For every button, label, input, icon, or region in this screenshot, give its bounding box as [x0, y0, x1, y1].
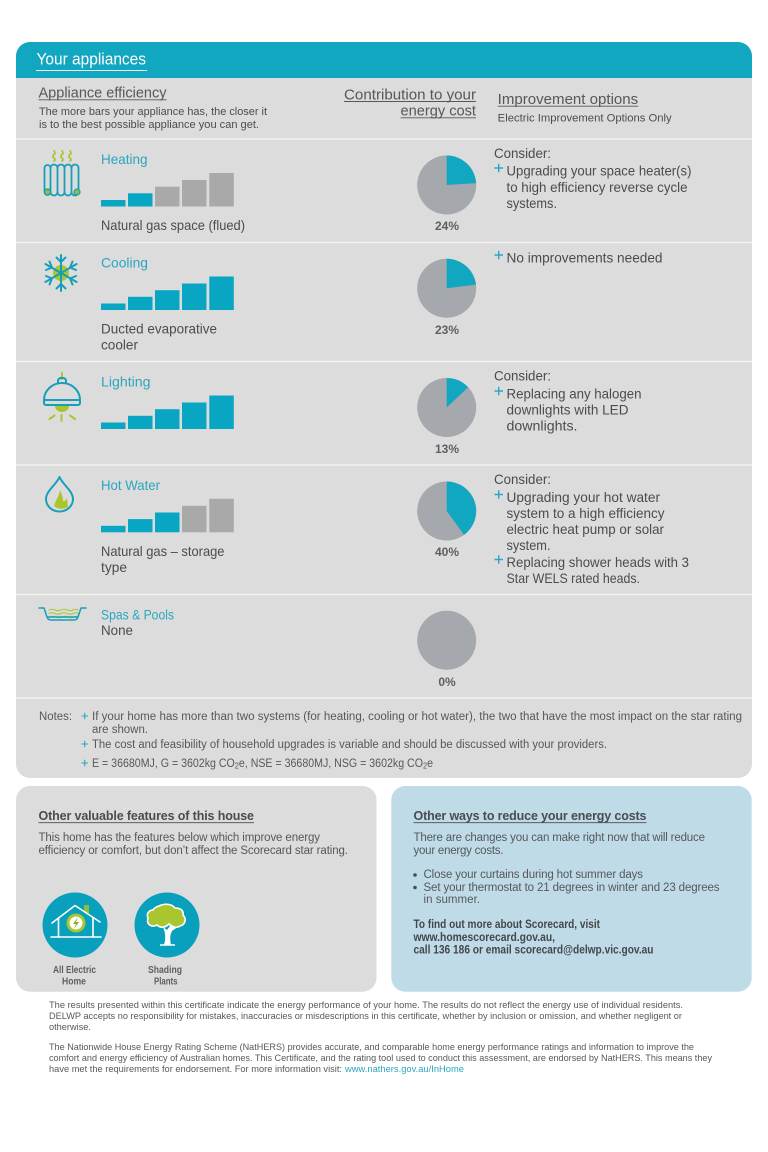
icon: water drop with flame — [46, 477, 73, 511]
improvement options: cooling: No improvements needed — [506, 250, 662, 266]
panel: your appliances — [16, 42, 752, 778]
text: features description — [38, 832, 348, 857]
text: none: None — [101, 622, 133, 638]
text: cooling system — [101, 320, 217, 352]
bar chart: heating efficiency — [101, 173, 234, 206]
list: energy tips: in summer. — [424, 894, 480, 906]
heading: improvement options: Improvement options — [498, 91, 638, 108]
improvement options: lighting — [494, 368, 642, 434]
improvement options: hot water: Replacing shower heads with 3 — [506, 554, 689, 570]
icon: radiator — [44, 151, 80, 196]
label: heating: Heating — [101, 151, 148, 167]
icon: shading plants tree — [134, 892, 200, 958]
list: energy tips — [413, 869, 720, 906]
text: hot water system — [101, 543, 225, 575]
label: cooling: Cooling — [101, 254, 148, 270]
row: heating — [44, 145, 692, 233]
label: lighting: Lighting — [101, 374, 150, 390]
label: shading plants: Plants — [154, 977, 178, 988]
text: NatHERS statement: www.nathers.gov.au/InHome — [344, 1064, 464, 1075]
row: lighting — [44, 368, 642, 456]
notes: Notes: — [39, 711, 72, 723]
text: NatHERS statement: comfort and energy efficiency of Australian homes. This Certificate, and the rating tool used to conduct this assessment, are endorsed by NatHERS. This means they — [49, 1053, 712, 1064]
text: find out more: www.homescorecard.gov.au, — [413, 932, 555, 944]
icon: all electric home — [42, 892, 108, 958]
heading: contribution to energy cost — [344, 86, 477, 120]
label: all electric home — [53, 965, 96, 988]
text: changes description: your energy costs. — [414, 845, 504, 857]
heading: other valuable features: Other valuable features of this house — [38, 809, 254, 823]
improvement options: lighting: Consider: — [494, 368, 551, 384]
improvement options: hot water: system to a high efficiency — [506, 505, 664, 521]
improvement options: hot water: Upgrading your hot water — [506, 489, 660, 505]
text: heating system: Natural gas space (flued) — [101, 217, 245, 233]
notes: 2 — [423, 762, 428, 770]
heading: appliance efficiency: The more bars your appliance has, the closer it — [39, 106, 267, 118]
notes: The cost and feasibility of household upgrades is variable and should be discussed with your providers. — [92, 739, 607, 751]
improvement options: hot water: system. — [506, 537, 550, 553]
label: all electric home: Home — [62, 977, 86, 988]
icon: snowflake — [45, 255, 77, 291]
panel: other valuable features — [16, 786, 376, 992]
heading: contribution to energy cost: Contribution to your — [344, 86, 476, 103]
text: find out more: call 136 186 or email scorecard@delwp.vic.gov.au — [414, 944, 654, 956]
list: energy tips: Close your curtains during hot summer days — [424, 869, 643, 881]
text: find out more: To find out more about Scorecard, visit — [414, 919, 600, 931]
icon: pool — [39, 608, 86, 620]
value: 24%: 24% — [435, 219, 459, 233]
text: disclaimer — [49, 1000, 683, 1033]
notes: 2 — [235, 762, 239, 770]
bar chart: hot water efficiency — [101, 499, 234, 532]
text: NatHERS statement — [49, 1042, 712, 1075]
improvement options: hot water — [494, 471, 689, 586]
improvement options: hot water: Consider: — [494, 471, 551, 487]
notes: E = 36680MJ, G = 3602kg CO — [92, 758, 247, 770]
improvement options: hot water: electric heat pump or solar — [506, 521, 664, 537]
text: hot water system: Natural gas – storage — [101, 543, 225, 559]
label: shading plants — [148, 965, 182, 988]
pie chart: spas and pools 0% — [417, 611, 476, 670]
panel: other ways to reduce energy costs — [391, 786, 752, 992]
text: features description: This home has the features below which improve energy — [38, 832, 320, 844]
improvement options: lighting: downlights with LED — [506, 402, 628, 418]
value: 23%: 23% — [435, 323, 459, 337]
title: Your appliances — [36, 50, 146, 68]
improvement options: heating: to high efficiency reverse cycle — [506, 179, 688, 195]
heading: other ways to reduce: Other ways to reduce your energy costs — [414, 809, 647, 823]
row: spas and pools — [39, 607, 476, 689]
heading: improvement options — [498, 91, 672, 124]
value: 40%: 40% — [435, 545, 459, 559]
row: hot water — [46, 471, 689, 586]
text: features description: efficiency or comfort, but don’t affect the Scorecard star rating. — [38, 845, 348, 857]
label: shading plants: Shading — [148, 965, 182, 976]
heading: appliance efficiency — [38, 84, 267, 131]
notes — [39, 711, 742, 770]
notes: are shown. — [92, 724, 148, 736]
improvement options: heating: Upgrading your space heater(s) — [506, 163, 692, 179]
label: all electric home: All Electric — [53, 965, 96, 976]
text: disclaimer: otherwise. — [49, 1022, 91, 1033]
value: 13%: 13% — [435, 442, 459, 456]
text: NatHERS statement: The Nationwide House Energy Rating Scheme (NatHERS) provides accurate, and comparable home energy performance ratings and information to improve the — [49, 1042, 694, 1053]
notes: If your home has more than two systems (for heating, cooling or hot water), the two that have the most impact on the star rating — [92, 711, 742, 723]
heading: appliance efficiency: Appliance efficiency — [38, 84, 167, 102]
improvement options: hot water: Star WELS rated heads. — [506, 570, 640, 586]
list: energy tips: Set your thermostat to 21 degrees in winter and 23 degrees — [424, 882, 720, 894]
pie chart: hot water 40% — [417, 482, 476, 540]
bar chart: cooling efficiency — [101, 276, 234, 310]
bar chart: lighting efficiency — [101, 396, 234, 429]
pie chart: lighting 13% — [417, 378, 476, 437]
notes: e — [427, 758, 433, 770]
heading: appliance efficiency: is to the best possible appliance you can get. — [39, 119, 259, 131]
heading: improvement options: Electric Improvement Options Only — [498, 112, 672, 124]
improvement options: heating — [494, 145, 692, 211]
pie chart: heating 24% — [417, 156, 476, 214]
label: hot water: Hot Water — [101, 477, 160, 493]
text: hot water system: type — [101, 559, 127, 575]
text: NatHERS statement: have met the requirements for endorsement. For more information visit: — [49, 1064, 342, 1075]
improvement options: heating: Consider: — [494, 145, 551, 161]
row: cooling — [45, 250, 662, 352]
text: find out more — [413, 919, 654, 956]
heading: contribution to energy cost: energy cost — [400, 103, 477, 120]
label: spas and pools: Spas & Pools — [101, 607, 174, 623]
text: cooling system: Ducted evaporative — [101, 320, 217, 336]
text: cooling system: cooler — [101, 336, 138, 352]
pie chart: cooling 23% — [417, 259, 476, 318]
text: disclaimer: DELWP accepts no responsibility for mistakes, inaccuracies or misdescriptions in this certificate, whether by inclusion or omission, and whether negligent or — [49, 1011, 682, 1022]
icon: pendant lamp — [44, 373, 80, 421]
text: disclaimer: The results presented within this certificate indicate the energy performance of your home. The results do not reflect the energy use of individual residents. — [49, 1000, 683, 1011]
improvement options: lighting: downlights. — [506, 418, 578, 434]
notes: e, NSE = 36680MJ, NSG = 3602kg CO — [239, 758, 423, 770]
improvement options: heating: systems. — [506, 195, 557, 211]
improvement options: lighting: Replacing any halogen — [506, 386, 642, 402]
text: changes description — [414, 832, 705, 857]
value: 0%: 0% — [438, 675, 456, 689]
text: changes description: There are changes you can make right now that will reduce — [414, 832, 705, 844]
